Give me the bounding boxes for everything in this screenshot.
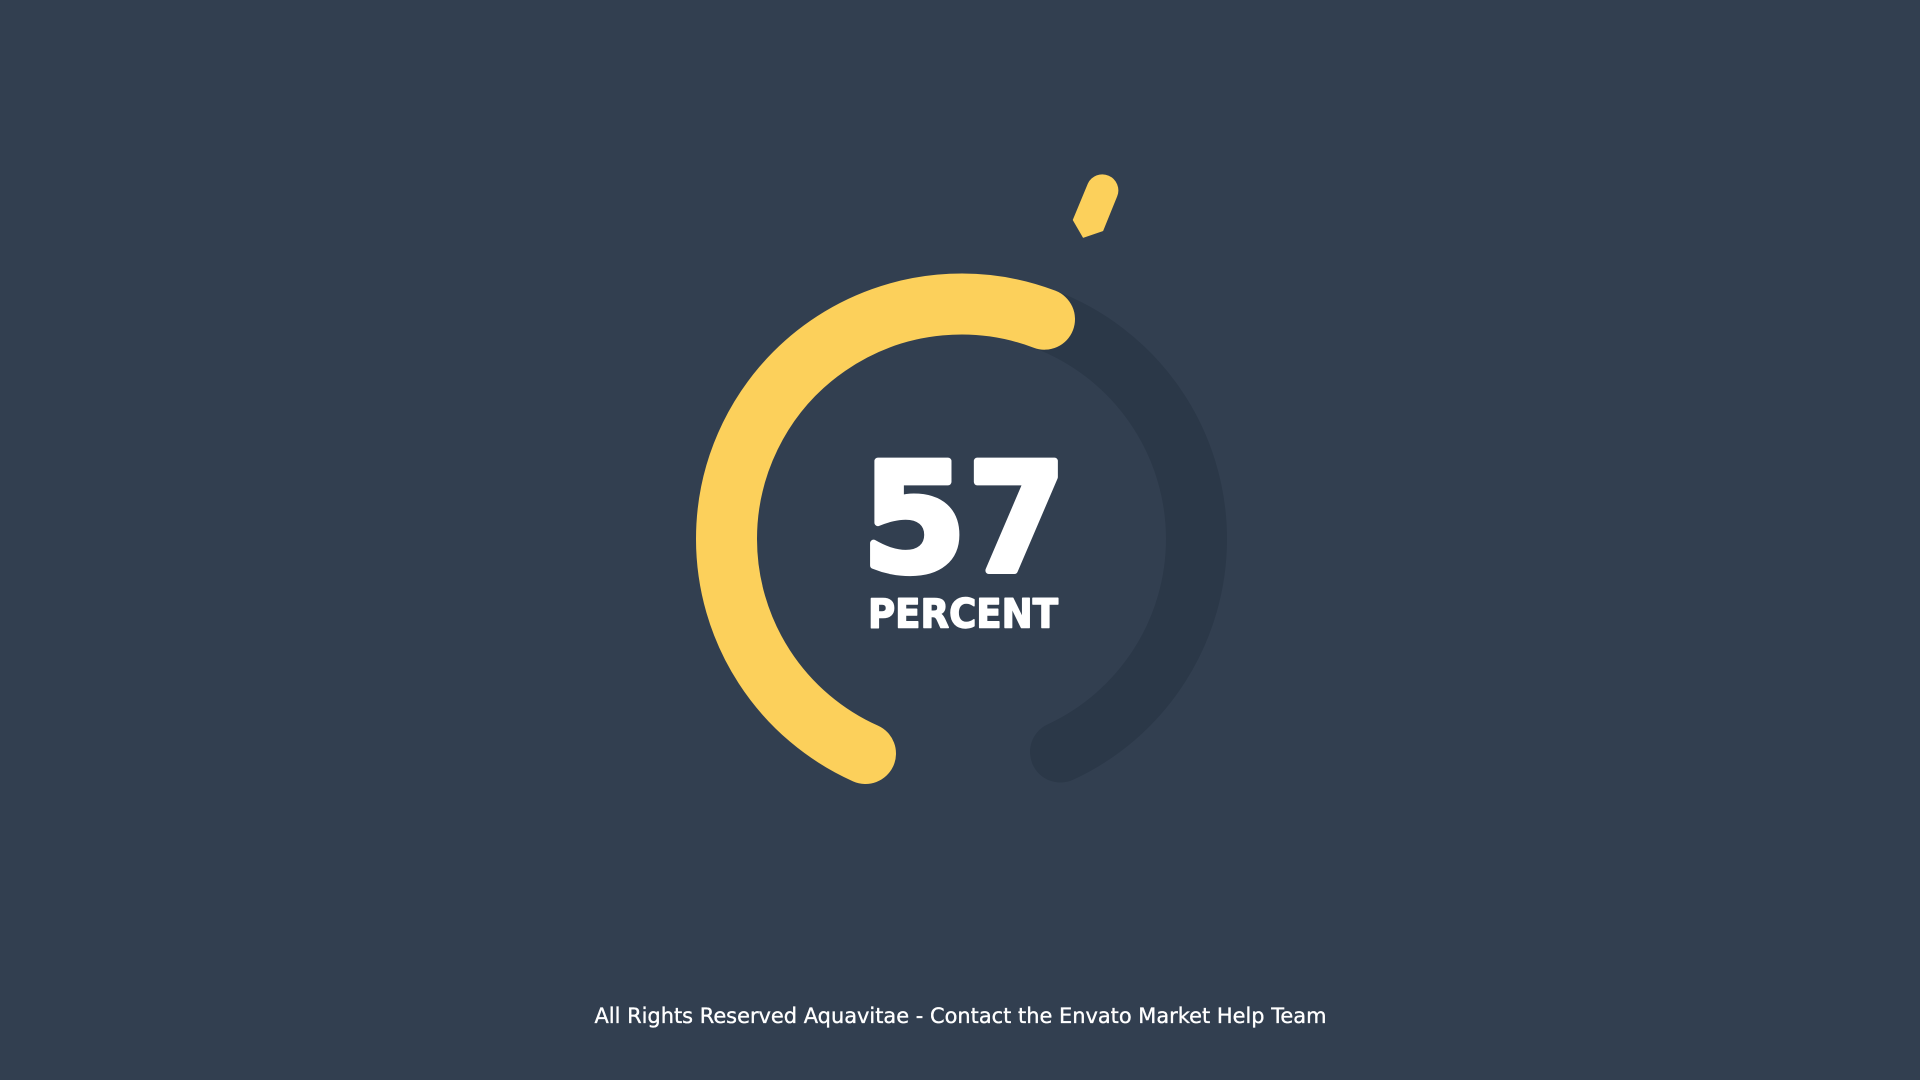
footer credit line: All Rights Reserved Aquavitae - Contact the Envato Market Help Team <box>594 1004 1326 1028</box>
gauge fill: 57 percent <box>726 304 1044 754</box>
digit 7: 7 <box>968 432 1066 607</box>
icon: yellow fragment above gauge <box>1073 175 1118 237</box>
gauge track: remaining 43 percent <box>1044 319 1196 752</box>
value: 57 <box>862 432 1066 607</box>
gauge: radial progress ring <box>726 304 1196 754</box>
digit 5: 5 <box>862 432 966 606</box>
label: PERCENT: PERCENT <box>868 592 1059 638</box>
